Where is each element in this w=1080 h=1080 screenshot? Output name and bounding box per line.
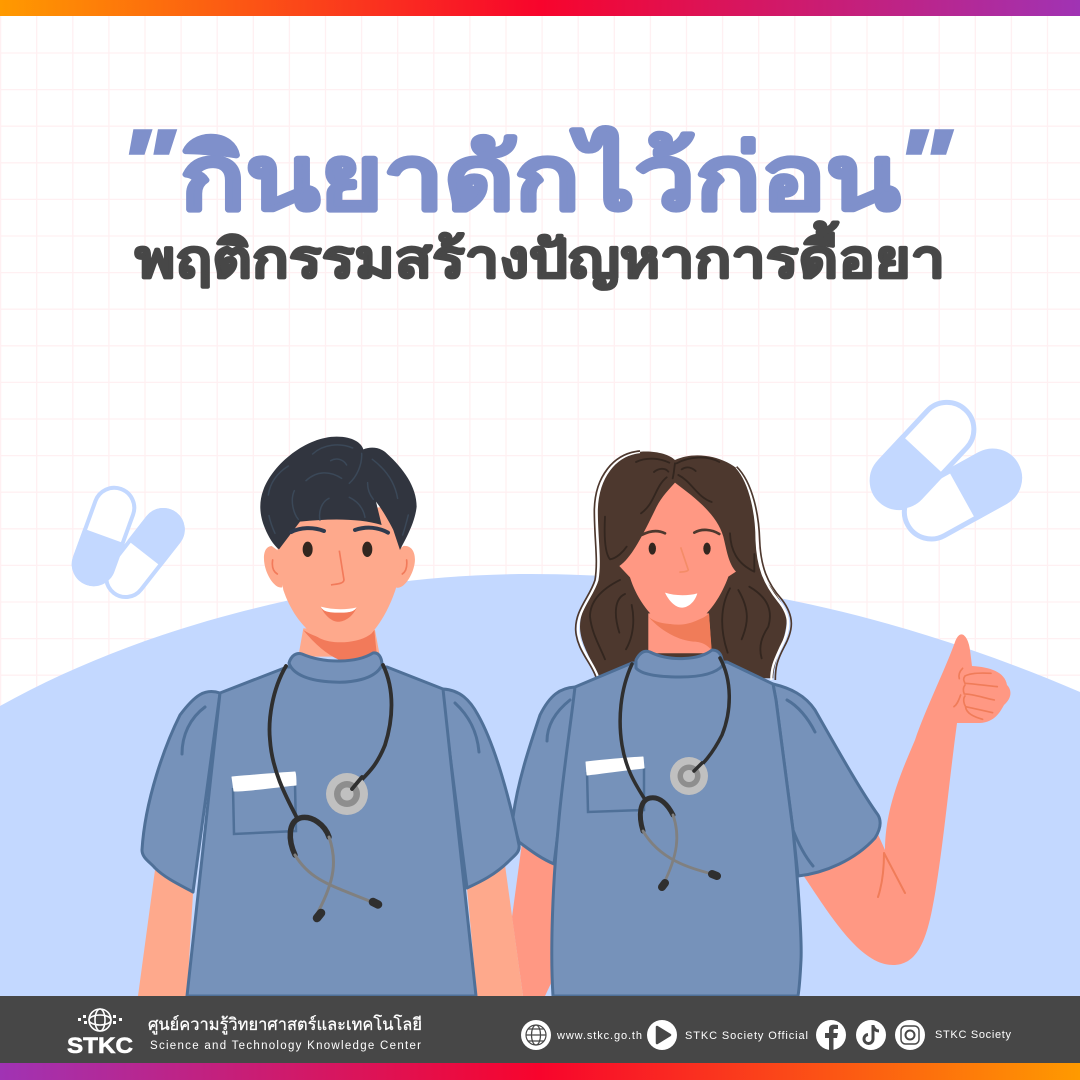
title: ": [895, 112, 953, 214]
icon: facebook: [816, 1020, 846, 1050]
woman hair: [576, 451, 791, 680]
icon: play: [647, 1020, 677, 1050]
man character: [138, 437, 523, 996]
subtitle: พฤติกรรมสร้างปัญหาการดื้อยา: [135, 221, 945, 290]
top gradient bar: [0, 0, 1080, 16]
icon: globe: [521, 1020, 551, 1050]
man scrub shirt: [142, 653, 519, 996]
woman character: [512, 451, 1010, 996]
bottom gradient bar: [0, 1063, 1080, 1080]
man arms: [138, 865, 523, 996]
woman stethoscope: [620, 658, 729, 887]
website text: www.stkc.go.th: [556, 1030, 642, 1042]
instagram name: STKC Society: [935, 1029, 1012, 1041]
icon: STKC logo: STKC: [67, 1033, 133, 1058]
icon: STKC logo: [67, 1009, 133, 1058]
icon: instagram: [895, 1020, 925, 1050]
title: ": [118, 112, 176, 214]
title: [118, 112, 953, 229]
organisation name Thai: ศูนย์ความรู้วิทยาศาสตร์และเทคโนโลยี: [148, 1014, 422, 1035]
man head: [260, 437, 417, 662]
youtube name: STKC Society Official: [685, 1030, 808, 1042]
woman face and neck: [619, 483, 736, 653]
blue hill background: [0, 574, 1080, 1000]
organisation name English: Science and Technology Knowledge Center: [150, 1040, 421, 1052]
footer bar: [0, 996, 1080, 1063]
icon: large capsules right: [859, 391, 1031, 551]
icon: tiktok: [856, 1020, 886, 1050]
woman scrub shirt: [513, 650, 880, 996]
woman left arm: [512, 843, 554, 996]
icon: small capsules left: [66, 482, 193, 606]
man pocket: [232, 772, 296, 834]
title: กินยาดักไว้ก่อน: [180, 127, 900, 229]
woman raised arm and thumbs-up hand: [803, 634, 1010, 965]
man stethoscope: [270, 665, 392, 918]
woman pocket: [586, 757, 644, 812]
